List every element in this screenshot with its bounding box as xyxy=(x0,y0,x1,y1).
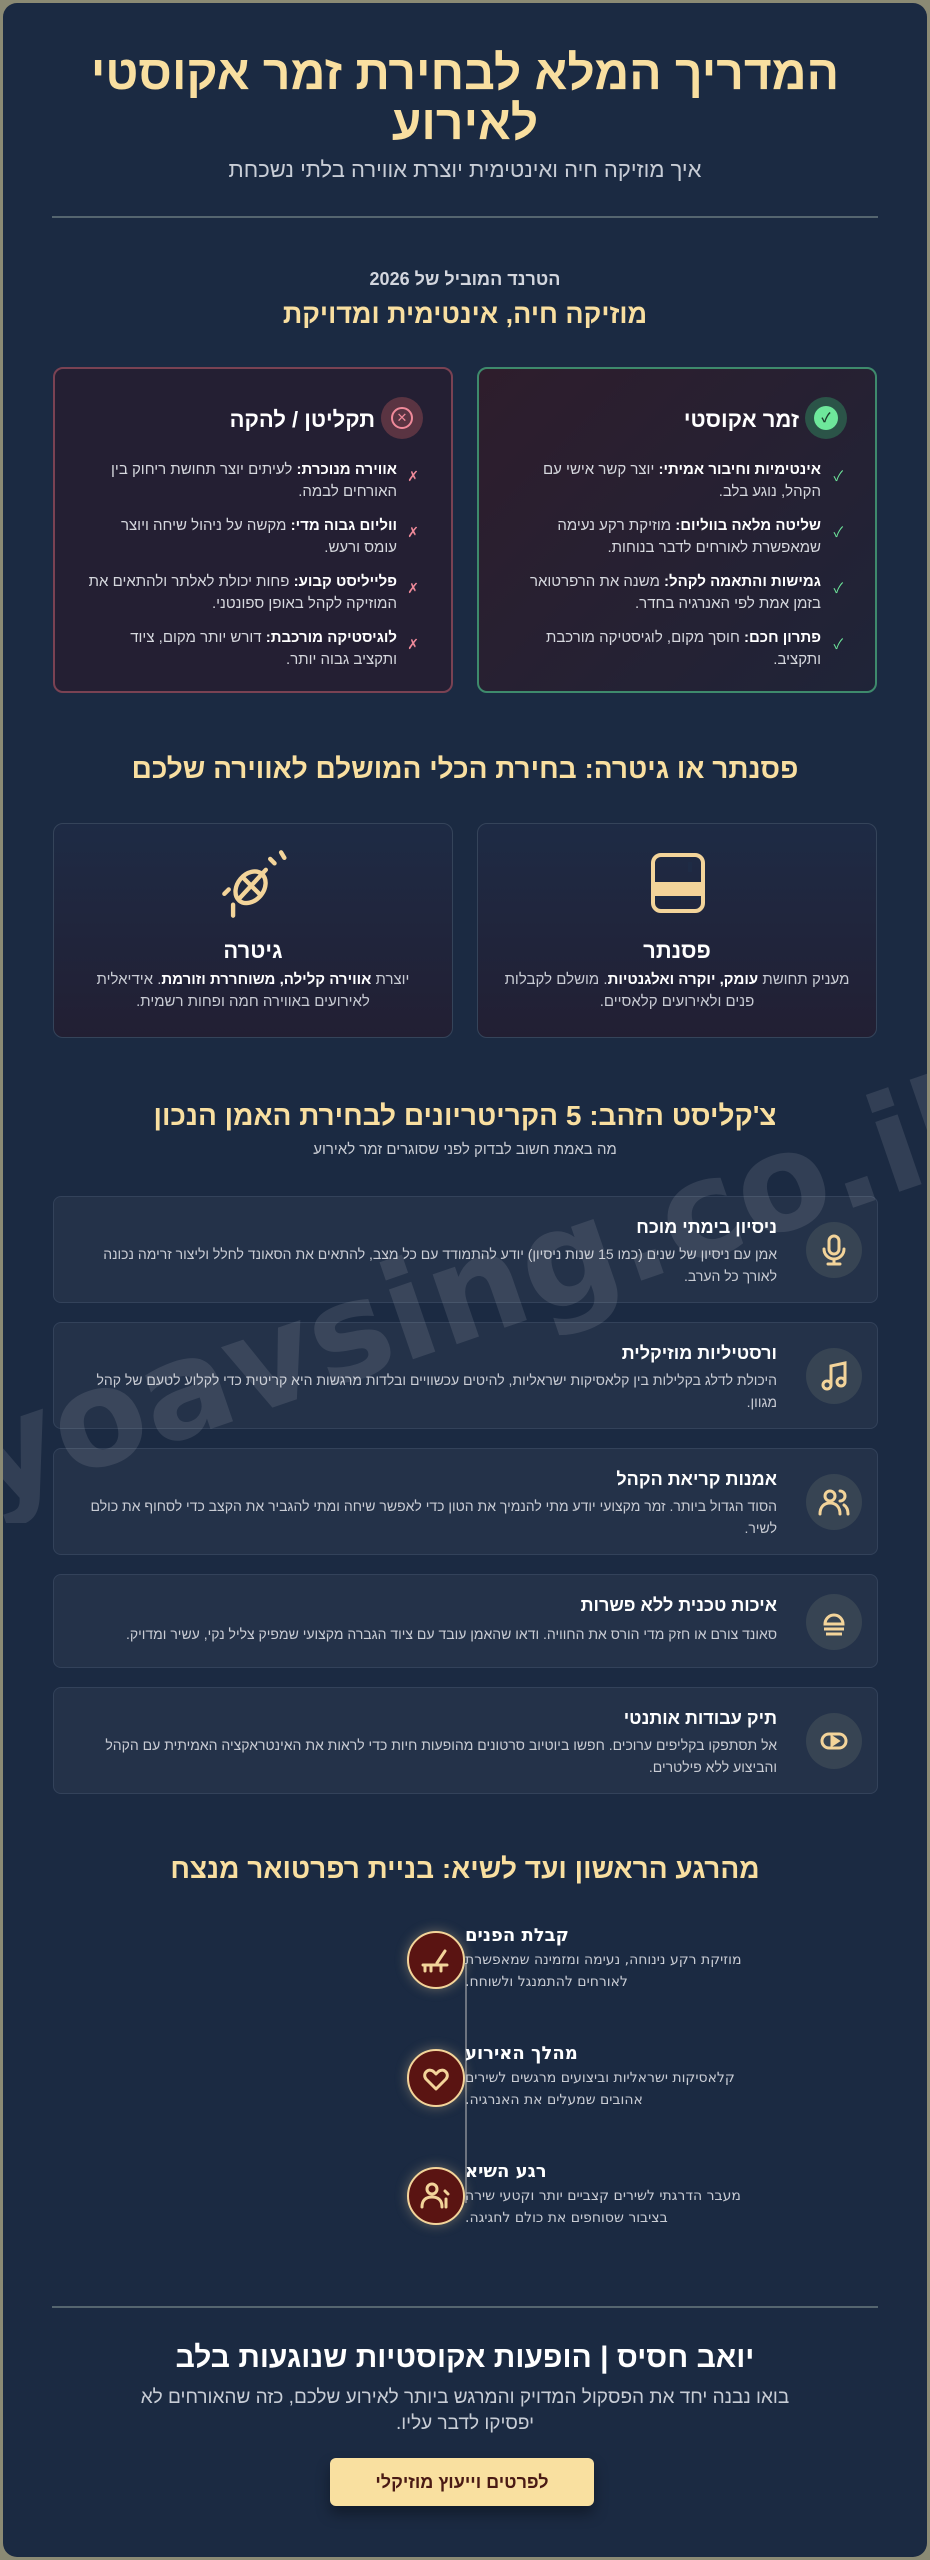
panel: DJ / band: תקליטן / להקה xyxy=(230,407,375,432)
panel: guitar: גיטרה xyxy=(223,938,283,963)
timeline step: reception: קבלת הפנים xyxy=(465,1925,569,1946)
panel: acoustic singer: ✓ xyxy=(833,636,843,652)
CTA button: לפרטים וייעוץ מוזיקלי xyxy=(375,2472,549,2492)
title xyxy=(91,47,839,150)
checklist item: crowd reading: הסוד הגדול ביותר. זמר מקצועי יודע מתי להנמיך את הטון כדי לאפשר שיחה ומתי להגביר את הקצב כדי לסחוף את כולם לשיר. xyxy=(91,1498,777,1536)
icon: piano xyxy=(651,853,705,913)
checklist item: crowd reading xyxy=(53,1448,878,1555)
checklist item: sound quality xyxy=(53,1574,878,1668)
panel: piano: פסנתר xyxy=(643,938,711,963)
heading: piano or guitar: פסנתר או גיטרה: בחירת הכלי המושלם לאווירה שלכם xyxy=(132,753,798,784)
timeline step: reception: מוזיקת רקע נינוחה, נעימה ומזמינה שמאפשרת לאורחים להתמנגל ולשוחח. xyxy=(465,1952,741,1990)
timeline step: peak xyxy=(401,2161,741,2231)
panel: DJ / band: ✗ xyxy=(407,468,419,484)
title: לאירוע xyxy=(392,97,538,150)
trend heading: מוזיקה חיה, אינטימית ומדויקת xyxy=(283,299,647,329)
timeline step: event: מהלך האירוע xyxy=(465,2043,578,2064)
icon: mic xyxy=(806,1222,862,1278)
panel: piano: מעניק תחושת עומק, יוקרה ואלגנטיות. מושלם לקבלות פנים ולאירועים קלאסיים. xyxy=(505,971,849,1010)
icon: speaker xyxy=(806,1594,862,1650)
footer title: יואב חסיס | הופעות אקוסטיות שנוגעות בלב xyxy=(176,2341,754,2374)
icon: check: ✓ xyxy=(821,410,831,425)
icon: x: ✕ xyxy=(397,410,407,425)
trend label: הטרנד המוביל של 2026 xyxy=(370,269,560,289)
checklist item: versatility: ורסטיליות מוזיקלית xyxy=(622,1343,777,1363)
checklist item: experience: אמן עם ניסיון של שנים (כמו 15 שנות ניסיון) יודע להתמודד עם כל מצב, להתאים את הסאונד לחלל וליצור זרימה נכונה לאורך כל הערב. xyxy=(103,1246,777,1284)
panel: DJ / band: ווליום גבוה מדי: מקשה על ניהול שיחה ויוצר עומס ורעש. xyxy=(121,517,397,556)
icon: note xyxy=(806,1348,862,1404)
panel: acoustic singer: ✓ xyxy=(833,524,843,540)
panel: acoustic singer: פתרון חכם: חוסך מקום, לוגיסטיקה מורכבת ותקציב. xyxy=(546,629,821,668)
panel: guitar: יוצרת אווירה קלילה, משוחררת וזורמת. אידיאלית לאירועים באווירה חמה ופחות רשמית. xyxy=(97,971,409,1010)
panel: acoustic singer: ✓ xyxy=(833,580,843,596)
icon: x xyxy=(381,397,423,439)
panel: DJ / band: ✗ xyxy=(407,524,419,540)
timeline step: peak: מעבר הדרגתי לשירים קצביים יותר וקטעי שירה בציבור שסוחפים את כולם לחגיגה. xyxy=(465,2188,741,2226)
icon: check xyxy=(805,397,847,439)
panel: DJ / band xyxy=(53,367,453,693)
checklist item: portfolio: תיק עבודות אותנטי xyxy=(624,1708,777,1728)
title: המדריך המלא לבחירת זמר אקוסטי xyxy=(91,47,839,100)
checklist item: sound quality: איכות טכנית ללא פשרות xyxy=(581,1595,777,1615)
panel: acoustic singer xyxy=(477,367,877,693)
panel: acoustic singer: שליטה מלאה בווליום: מוזיקת רקע נעימה שמאפשרת לאורחים לדבר בנוחות. xyxy=(557,517,821,556)
panel: piano xyxy=(477,823,877,1038)
CTA button xyxy=(330,2458,594,2506)
checklist item: crowd reading: אמנות קריאת הקהל xyxy=(616,1469,777,1489)
checklist item: experience: ניסיון בימתי מוכח xyxy=(636,1217,777,1237)
timeline step: reception xyxy=(401,1925,741,1995)
heading: checklist: צ'קליסט הזהב: 5 הקריטריונים לבחירת האמן הנכון xyxy=(154,1100,776,1131)
subtitle: איך מוזיקה חיה ואינטימית יוצרת אווירה בלתי נשכחת xyxy=(229,157,701,182)
icon: guitar xyxy=(222,850,287,918)
timeline step: peak: רגע השיא xyxy=(465,2161,547,2182)
icon: people xyxy=(806,1474,862,1530)
footer text: בואו נבנה יחד את הפסקול המדויק והמרגש ביותר לאירוע שלכם, כזה שהאורחים לא יפסיקו לדבר עליו. xyxy=(141,2387,789,2434)
panel: acoustic singer: ✓ xyxy=(833,468,843,484)
panel: DJ / band: ✗ xyxy=(407,580,419,596)
panel: acoustic singer: זמר אקוסטי xyxy=(684,407,799,432)
icon: video xyxy=(806,1713,862,1769)
panel: DJ / band: ✗ xyxy=(407,636,419,652)
checklist item: portfolio: אל תסתפקו בקליפים ערוכים. חפשו ביוטיוב סרטונים מהופעות חיות כדי לראות את האינטראקציה האמיתית עם הקהל והביצוע ללא פילטרים. xyxy=(105,1737,777,1775)
checklist item: experience xyxy=(53,1196,878,1303)
checklist item: versatility xyxy=(53,1322,878,1429)
panel: guitar xyxy=(53,823,453,1038)
timeline step: event xyxy=(401,2043,735,2113)
panel: acoustic singer: גמישות והתאמה לקהל: משנה את הרפרטואר בזמן אמת לפי האנרגיה בחדר. xyxy=(530,573,821,612)
timeline step: event: קלאסיקות ישראליות וביצועים מרגשים לשירים אהובים שמעלים את האנרגיה. xyxy=(465,2070,735,2108)
panel: DJ / band: פלייליסט קבוע: פחות יכולת לאלתר ולהתאים את המוזיקה לקהל באופן ספונטני. xyxy=(89,573,397,612)
checklist subtitle: מה באמת חשוב לבדוק לפני שסוגרים זמר לאירוע xyxy=(313,1141,617,1158)
panel: DJ / band: אווירה מנוכרת: לעיתים יוצר תחושת ריחוק בין האורחים לבמה. xyxy=(111,461,397,500)
panel: acoustic singer: אינטימיות וחיבור אמיתי: יוצר קשר אישי עם הקהל, נוגע בלב. xyxy=(543,461,821,500)
panel: DJ / band: לוגיסטיקה מורכבת: דורש יותר מקום, ציוד ותקציב גבוה יותר. xyxy=(130,629,397,668)
heading: timeline: מהרגע הראשון ועד לשיא: בניית רפרטואר מנצח xyxy=(170,1853,760,1884)
checklist item: portfolio xyxy=(53,1687,878,1794)
checklist item: versatility: היכולת לדלג בקלילות בין קלאסיקות ישראליות, להיטים עכשוויים ובלדות מרגשות היא קריטית כדי לקלוע לטעם של קהל מגוון. xyxy=(96,1372,777,1410)
checklist item: sound quality: סאונד צורם או חזק מדי הורס את החוויה. ודאו שהאמן עובד עם ציוד הגברה מקצועי שמפיק צליל נקי, עשיר ומדויק. xyxy=(126,1626,777,1642)
